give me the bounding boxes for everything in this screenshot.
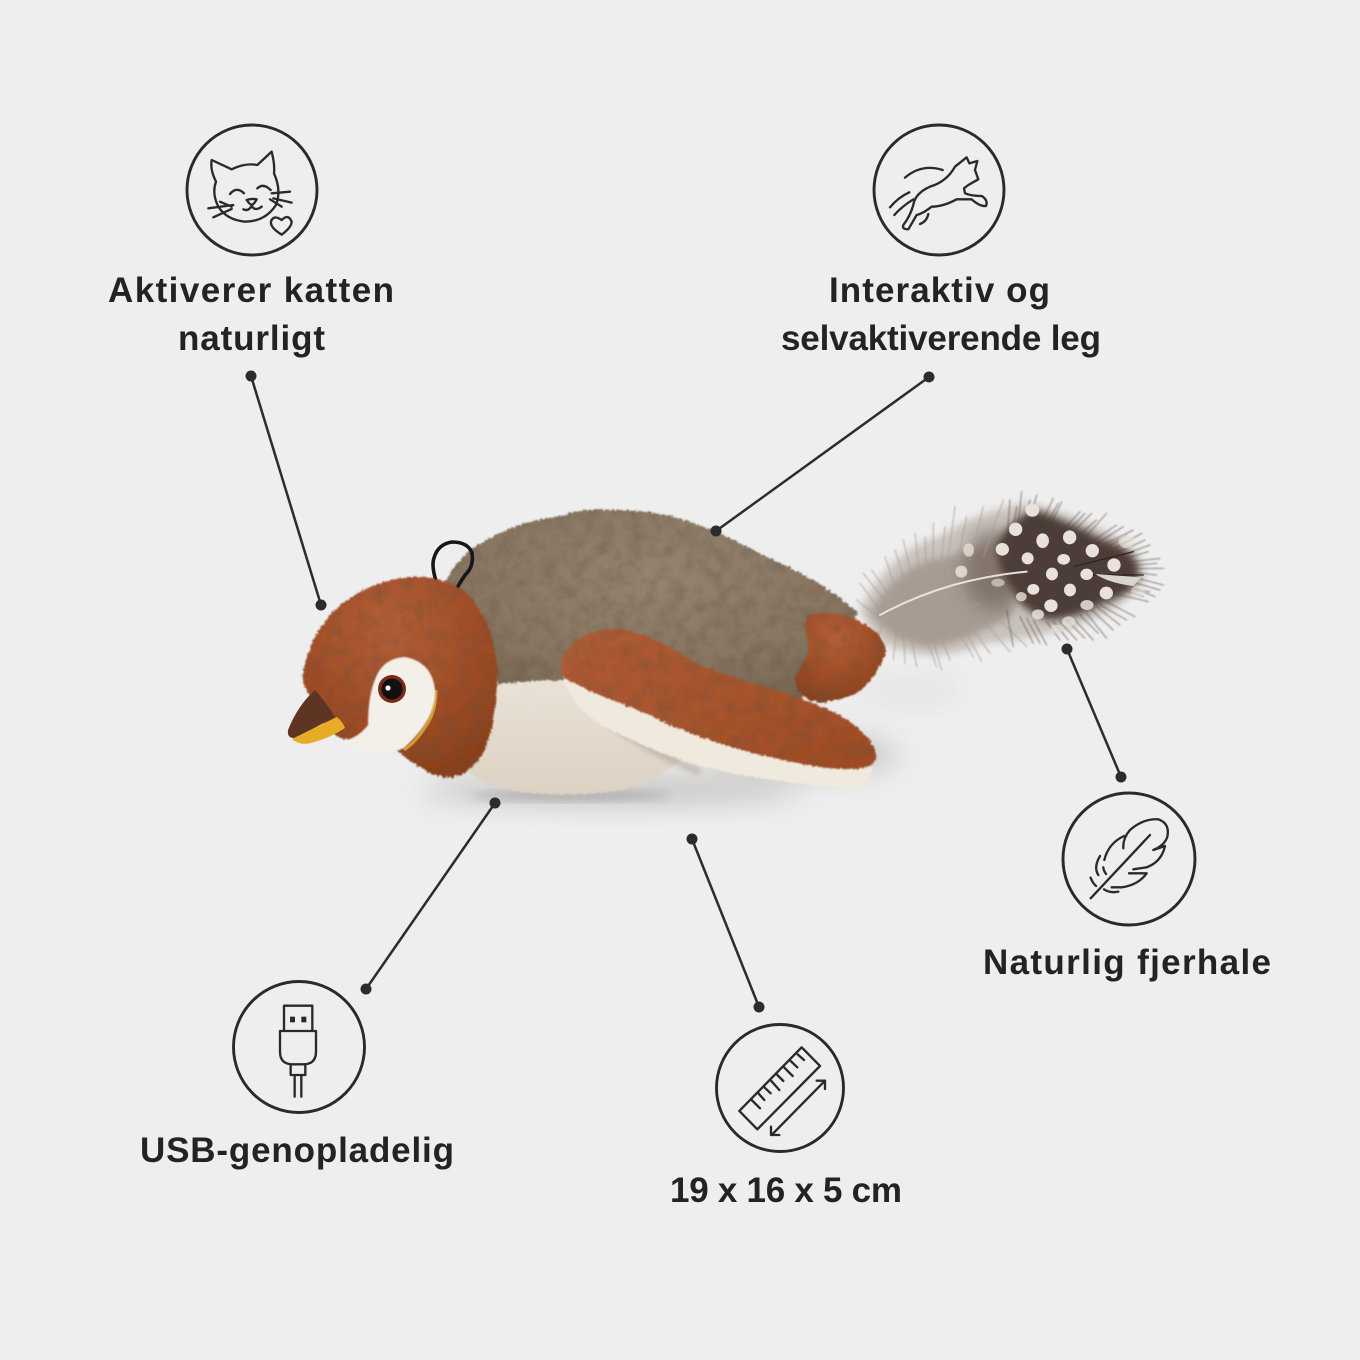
- feature: USB-genopladelig: [140, 798, 500, 1170]
- leader line: [360, 798, 500, 994]
- wing: [560, 629, 876, 787]
- icon: leaping cat: [874, 125, 1004, 255]
- head: [303, 577, 497, 777]
- feature: Interaktiv og selvaktiverende leg: [710, 125, 1101, 536]
- feature: dimensions: [670, 834, 902, 1210]
- body: [445, 510, 858, 700]
- heading: naturligt: [178, 319, 325, 358]
- hanging loop: [433, 542, 472, 590]
- beak: [288, 690, 345, 744]
- heading: selvaktiverende leg: [781, 319, 1101, 358]
- leader line: [246, 370, 326, 610]
- leader line: [710, 372, 934, 536]
- heading: 19 x 16 x 5 cm: [670, 1171, 902, 1210]
- icon: ruler with arrow: [716, 1024, 844, 1152]
- icon: happy cat with heart: [187, 125, 317, 255]
- heading: Naturlig fjerhale: [983, 943, 1271, 982]
- ground shadow: [420, 680, 960, 804]
- heading: USB-genopladelig: [140, 1131, 454, 1170]
- eye patch: [343, 657, 436, 753]
- plush bird toy product photo: [288, 492, 1163, 804]
- feature: Aktiverer katten naturligt: [108, 125, 394, 610]
- feature: Naturlig fjerhale: [983, 644, 1271, 982]
- icon: feather: [1063, 793, 1195, 925]
- feather tail: [857, 492, 1163, 670]
- tail wing: [796, 613, 886, 703]
- icon: USB plug: [234, 982, 364, 1112]
- belly: [450, 670, 800, 794]
- leader line: [1062, 644, 1126, 782]
- leader line: [686, 834, 764, 1012]
- heading: Aktiverer katten: [108, 271, 394, 310]
- eye: [378, 675, 406, 703]
- heading: Interaktiv og: [829, 271, 1050, 310]
